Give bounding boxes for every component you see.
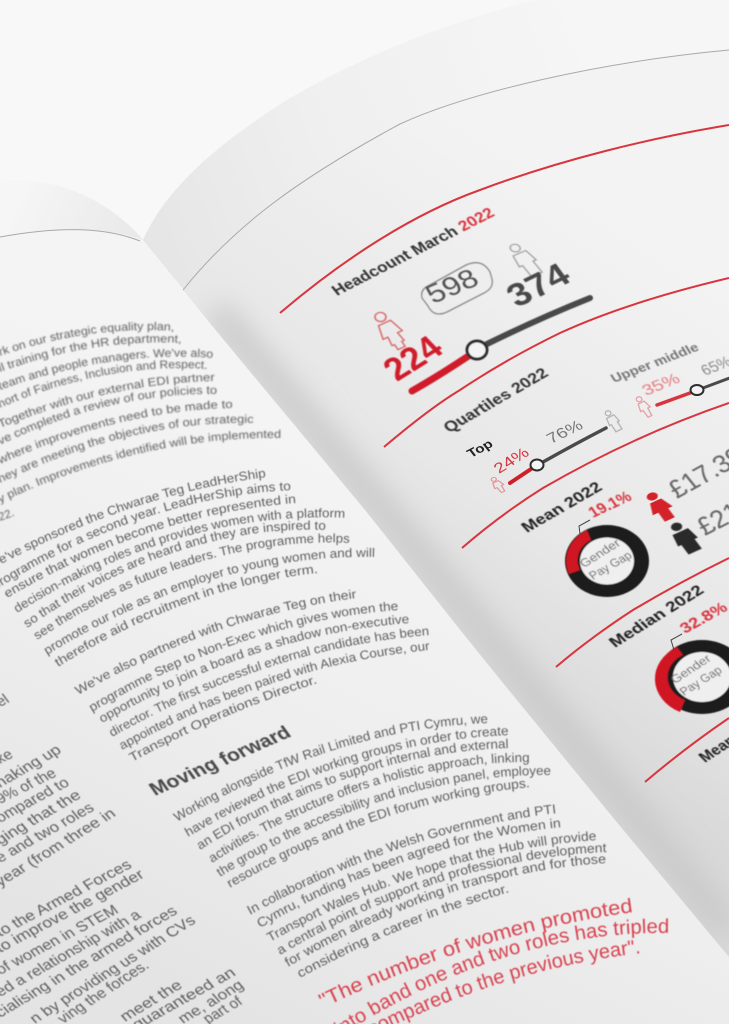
mean donut chart: Gender xyxy=(577,536,623,570)
text block: Step to Non-Exec: opportunity to join a board as a shadow non-executive xyxy=(100,614,410,722)
total badge 598 xyxy=(419,263,492,314)
top label: Top xyxy=(464,437,496,460)
text block: Step to Non-Exec: director. The first successful external candidate has been xyxy=(110,628,430,737)
icon: woman outline xyxy=(368,309,411,352)
text block: equality plan: hey are meeting the objectives of our strategic xyxy=(0,414,254,484)
panel: right page xyxy=(143,0,729,960)
text block: LeadHerShip programme: therefore aid recruitment in the longer term. xyxy=(54,566,318,667)
text block: LeadHerShip programme: so that their voices are heard and they are inspired to xyxy=(24,520,326,628)
text block: LeadHerShip programme: promote our role as an employer to young women and will xyxy=(44,547,375,658)
red divider third xyxy=(462,403,729,548)
text block: EDI forum: an EDI forum that aims to support internal and external xyxy=(197,738,508,850)
headcount title: Headcount March 2022 xyxy=(329,205,498,299)
icon: man outline xyxy=(504,241,545,278)
icon: man solid xyxy=(664,519,705,556)
text block: equality plan: y plan. Improvements identified will be implemented xyxy=(0,428,282,506)
panel: headcount xyxy=(280,125,729,447)
mean title: Mean 2022 xyxy=(518,479,606,536)
text block: EDI forum: resource groups and the EDI forum working groups. xyxy=(227,780,530,888)
upper middle women percent: 35% xyxy=(639,371,683,399)
text block: left column guarantee xyxy=(116,965,247,1024)
text block: EDI forum xyxy=(172,716,551,888)
right page edge line xyxy=(183,50,729,290)
text block: Step to Non-Exec: programme Step to Non-Exec which gives women the xyxy=(89,602,398,714)
panel: quartiles xyxy=(440,341,729,548)
mean leader line xyxy=(579,520,590,534)
median donut chart xyxy=(655,640,729,714)
icon: woman solid xyxy=(640,489,679,524)
text block: Women in Transport Wales Hub: Transport Wales Hub. We hope that the Hub will provide xyxy=(266,830,596,941)
icon: upper middle woman xyxy=(633,395,655,419)
text block: Women in Transport Wales Hub: considering a career in the sector. xyxy=(298,886,509,978)
red divider top xyxy=(280,125,729,313)
text block: EDI forum: the group to the accessibility and inclusion panel, employee xyxy=(216,766,551,877)
text block: EDI forum: have reviewed the EDI working groups in order to create xyxy=(184,726,508,837)
quartile: top xyxy=(464,409,624,494)
text block: equality plan: ll training for the HR department, xyxy=(0,334,182,372)
mean percent: 19.1% xyxy=(585,488,636,521)
text block: Women in Transport Wales Hub: a central point of support and professional development xyxy=(277,843,607,955)
text block: LeadHerShip programme: see themselves as future leaders. The programme helps xyxy=(34,532,350,640)
gutter shadow xyxy=(215,310,729,930)
text block: LeadHerShip programme xyxy=(0,468,375,667)
panel: mean pay gap xyxy=(518,442,729,667)
red divider fifth xyxy=(645,718,729,782)
text block: left column armed forces xyxy=(0,856,200,1024)
icon: top woman xyxy=(488,476,508,494)
text block: EDI forum: Working alongside TfW Rail Limited and PTI Cymru, we xyxy=(172,716,488,821)
red divider second xyxy=(384,278,729,447)
text block: equality plan: rk on our strategic equality plan, xyxy=(0,321,174,356)
text block: EDI forum: activities. The structure offers a holistic approach, linking xyxy=(209,752,530,863)
text block: equality plan xyxy=(0,321,282,524)
median donut chart: Pay Gap xyxy=(677,663,725,698)
median donut chart: Gender xyxy=(667,652,714,686)
right page outer band xyxy=(143,0,729,960)
text block: Women in Transport Wales Hub xyxy=(246,804,607,978)
text block: left column promotions xyxy=(0,691,119,890)
text block: Step to Non-Exec xyxy=(74,589,430,760)
text block: Step to Non-Exec: We've also partnered with Chwarae Teg on their xyxy=(74,589,356,694)
text block: equality plan: ve completed a review of our policies to xyxy=(0,386,218,444)
heading: moving forward: Moving forward xyxy=(146,723,295,800)
left page upper fold xyxy=(0,180,143,240)
text block: Women in Transport Wales Hub: In collaboration with the Welsh Government and PTI xyxy=(246,804,556,915)
text block: equality plan: team and people managers. We've also xyxy=(0,348,214,390)
text block: left column guarantee: meet the xyxy=(116,977,186,1024)
top slider xyxy=(510,428,606,483)
mean donut chart: Pay Gap xyxy=(586,548,635,582)
left page edge line xyxy=(0,230,140,241)
quartile: upper middle xyxy=(608,341,729,419)
text block: LeadHerShip programme: decision-making roles and provides women with a platform xyxy=(14,508,345,612)
panel: median pay gap xyxy=(606,582,729,782)
top women percent: 24% xyxy=(490,445,533,477)
median leader line xyxy=(671,634,682,650)
text block: Step to Non-Exec: Transport Operations Director. xyxy=(128,677,317,760)
right page inner sheet xyxy=(183,50,729,960)
top men percent: 76% xyxy=(543,417,587,447)
text block: Women in Transport Wales Hub: for women already working in transport and for those xyxy=(284,856,606,967)
quartiles title: Quartiles 2022 xyxy=(440,365,552,436)
men count: 374 xyxy=(499,256,577,315)
text block: LeadHerShip programme: ensure that women become better represented in xyxy=(4,494,296,598)
median title: Median 2022 xyxy=(606,582,708,651)
text block: equality plan: where improvements need to be made to xyxy=(0,400,233,464)
text block: Women in Transport Wales Hub: Cymru, funding has been agreed for the Women in xyxy=(257,818,561,927)
text block: equality plan: Together with our external EDI partner xyxy=(0,374,216,428)
median percent: 32.8% xyxy=(677,599,729,637)
text block: Step to Non-Exec: appointed and has been paired with Alexia Course, our xyxy=(120,642,430,750)
icon: top man xyxy=(602,409,624,433)
pull quote: "The number of women promoted xyxy=(318,897,632,1003)
text block: left column armed forces: n by providing us with CVs xyxy=(26,912,200,1024)
women count: 224 xyxy=(376,330,451,388)
text block: equality plan: hort of Fairness, Inclusion and Respect. xyxy=(0,360,207,408)
upper middle label: Upper middle xyxy=(608,341,701,386)
upper middle slider xyxy=(657,376,729,405)
total badge 598: 598 xyxy=(419,263,484,309)
headcount slider xyxy=(412,298,590,391)
red divider fourth xyxy=(556,558,729,667)
mean donut chart xyxy=(565,525,649,597)
